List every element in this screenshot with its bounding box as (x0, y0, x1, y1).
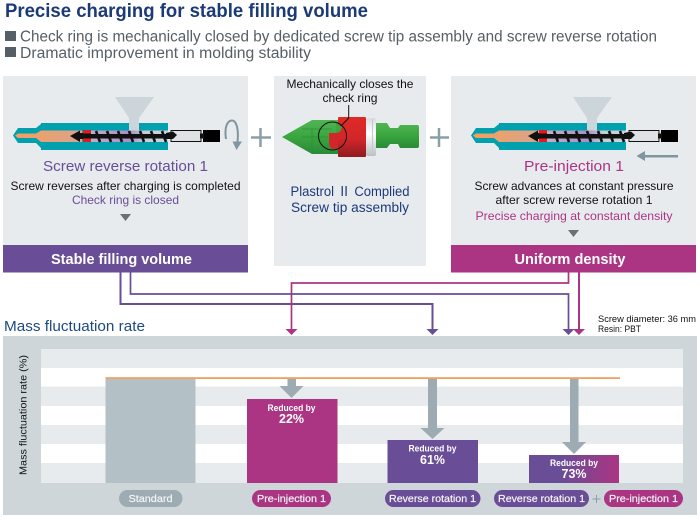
highlight: precise charging at constant density: Precise charging at constant density (476, 209, 672, 223)
plus sign (430, 128, 449, 147)
bullet points (5, 28, 657, 62)
panel: pre-injection (451, 76, 696, 245)
arrow: stable filling volume to reverse rotation bar (120, 272, 438, 335)
axis label: Mass fluctuation rate (%) (18, 355, 30, 475)
bar: combined 73% (529, 455, 619, 483)
description (474, 179, 674, 207)
icon: rotation arrow (225, 120, 242, 150)
arrow: reduction 73% (562, 378, 586, 454)
bar: reverse rotation 61% (388, 440, 478, 483)
result bar: stable filling volume (3, 245, 248, 272)
icon: forward arrow (636, 151, 678, 161)
panel: screw tip assembly (274, 76, 426, 266)
bar: standard (106, 378, 196, 483)
bullet points: Check ring is mechanically closed by dedicated screw tip assembly and screw reverse rotation (20, 28, 657, 46)
label pill: reverse rotation 1 (combined): Reverse rotation 1 (498, 493, 585, 505)
label pill: pre-injection 1 (combined) (604, 490, 683, 507)
bar: reverse rotation 61%: Reduced by (408, 444, 456, 454)
label: plastrol II screw tip assembly: Screw tip assembly (291, 200, 409, 215)
icon: screw tip assembly (282, 105, 419, 157)
plus sign (251, 128, 271, 147)
panel: bar chart (3, 336, 697, 515)
icon: injection screw cross-section, reverse rotation (13, 97, 220, 150)
description: Screw reverses after charging is completed (10, 179, 240, 193)
label pill: reverse rotation 1 (combined) (494, 490, 589, 507)
icon: down triangle (120, 214, 131, 221)
label pill: standard (119, 490, 182, 507)
note: test conditions: Resin: PBT (598, 324, 641, 334)
label pill: pre-injection 1 (252, 490, 331, 507)
arrow: reduction 61% (420, 378, 444, 439)
result bar: stable filling volume: Stable filling volume (51, 251, 192, 268)
icon: injection screw cross-section, pre-injection (471, 97, 678, 150)
label pill: pre-injection 1: Pre-injection 1 (257, 493, 326, 505)
label pill: standard: Standard (128, 493, 173, 505)
bullet points: Dramatic improvement in molding stability (20, 45, 311, 62)
bar: reverse rotation 61%: 61% (420, 453, 445, 467)
arrow: stable filling volume to combined bar (130, 272, 574, 335)
callout: mechanically closes the check ring: Mechanically closes the (286, 77, 414, 91)
baseline: standard level (106, 377, 620, 379)
label pill: pre-injection 1 (combined): Pre-injection 1 (609, 493, 678, 505)
bar: pre-injection 22% (247, 399, 338, 483)
note: test conditions (598, 314, 696, 334)
plus sign (592, 495, 600, 503)
heading: pre-injection 1: Pre-injection 1 (524, 158, 624, 175)
description: Screw advances at constant pressure (474, 179, 674, 193)
bar: pre-injection 22%: 22% (279, 412, 304, 426)
callout: mechanically closes the check ring (286, 77, 414, 105)
callout: mechanically closes the check ring: check ring (322, 91, 378, 105)
bar: pre-injection 22%: Reduced by (268, 403, 316, 413)
note: test conditions: Screw diameter: 36 mm (598, 314, 696, 324)
highlight: check ring is closed: Check ring is closed (72, 193, 179, 207)
result bar: uniform density (451, 245, 696, 272)
bar: combined 73%: 73% (562, 467, 586, 481)
result bar: uniform density: Uniform density (514, 251, 626, 268)
description: after screw reverse rotation 1 (496, 193, 653, 207)
label: plastrol II screw tip assembly (290, 184, 410, 215)
icon: down triangle (568, 230, 579, 237)
title: Precise charging for stable filling volume (5, 1, 368, 22)
arrow: reduction 22% (280, 378, 304, 398)
heading: screw reverse rotation 1: Screw reverse rotation 1 (43, 158, 208, 175)
heading: mass fluctuation rate: Mass fluctuation rate (4, 319, 145, 335)
label pill: reverse rotation 1: Reverse rotation 1 (389, 493, 476, 505)
arrow: uniform density to pre-injection bar (286, 272, 568, 335)
bar: combined 73%: Reduced by (550, 458, 598, 468)
panel: screw reverse rotation (3, 76, 248, 245)
label pill: reverse rotation 1 (385, 490, 480, 507)
label: plastrol II screw tip assembly: Plastrol Ⅱ Complied (290, 184, 410, 199)
arrow: uniform density to combined bar (573, 272, 585, 335)
